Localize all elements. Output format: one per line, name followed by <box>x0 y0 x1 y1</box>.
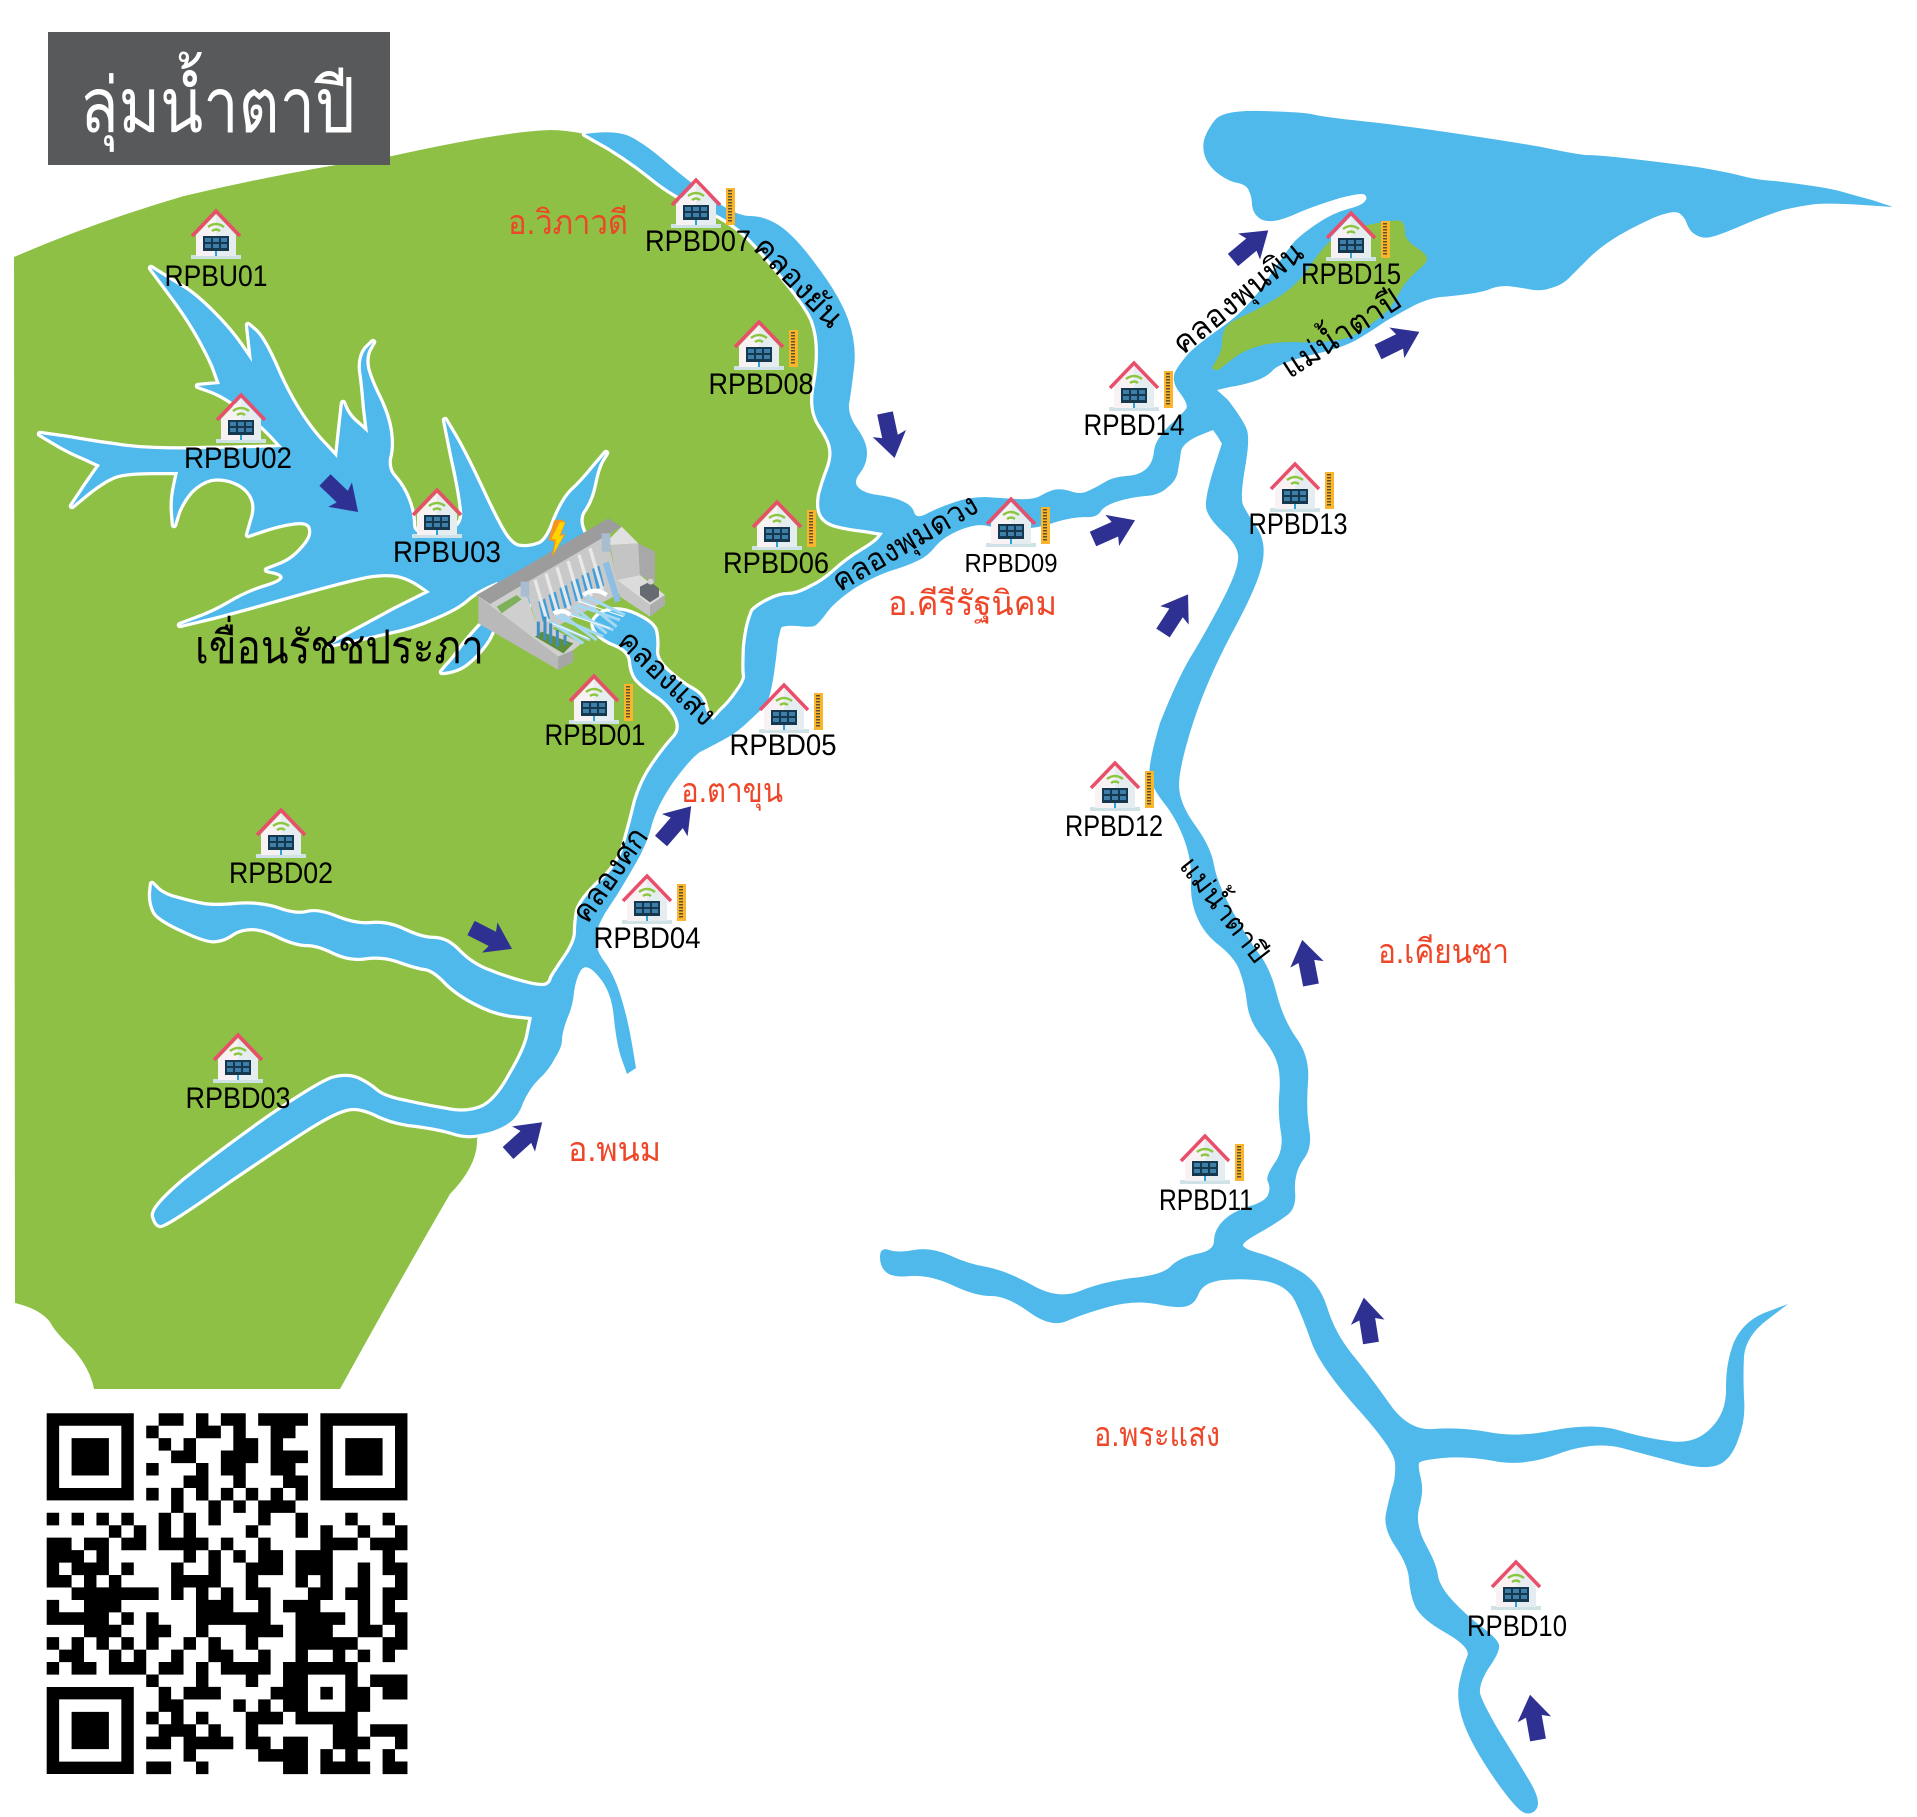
river label: Khlong Yan: คลองยัน <box>747 229 850 334</box>
station RPBD03: RPBD03 <box>186 1082 290 1115</box>
station RPBD06: RPBD06 <box>723 547 829 580</box>
station RPBD14: RPBD14 <box>1084 409 1184 442</box>
arrow: Tapi lower flow <box>1347 1295 1388 1346</box>
station RPBU03: RPBU03 <box>393 536 501 569</box>
station RPBD05 <box>730 685 836 762</box>
station RPBD05: RPBD05 <box>730 729 836 762</box>
river label: Khlong Phunphin: คลองพุนพิน <box>1165 234 1311 362</box>
station RPBD02: RPBD02 <box>229 857 333 890</box>
title <box>48 32 390 165</box>
station RPBD09 <box>964 499 1058 578</box>
river label: Khlong Saeng: คลองแสง <box>611 623 723 733</box>
QR code <box>47 1413 407 1774</box>
river label: Mae Nam Tapi mouth: แม่น้ำตาปี <box>1272 278 1407 385</box>
station RPBD15: RPBD15 <box>1301 258 1401 291</box>
station RPBD12: RPBD12 <box>1065 810 1163 843</box>
arrow: Khlong Phum Duang flow <box>1086 505 1142 555</box>
station RPBU02: RPBU02 <box>184 442 292 475</box>
arrow: Tapi headwater flow <box>1513 1692 1555 1743</box>
station RPBD15 <box>1301 213 1401 291</box>
arrow: Tapi mid flow <box>1286 937 1328 988</box>
station RPBD11 <box>1159 1136 1253 1217</box>
station RPBD13 <box>1248 464 1348 541</box>
district: Khian Sa: อ.เคียนซา <box>1378 933 1509 971</box>
station RPBD01 <box>544 676 646 752</box>
dam illustration <box>477 518 665 670</box>
station RPBD10 <box>1467 1562 1567 1643</box>
station RPBU01: RPBU01 <box>164 260 268 293</box>
arrow: tributary flow <box>463 913 520 964</box>
station RPBD10: RPBD10 <box>1467 1610 1567 1643</box>
station RPBD06 <box>723 502 829 580</box>
district: Khiri Rat Nikhom: อ.คีรีรัฐนิคม <box>888 585 1057 624</box>
station RPBU01 <box>164 211 268 293</box>
station RPBD08 <box>708 322 814 401</box>
land: green basin area <box>14 130 905 1389</box>
station RPBD07: RPBD07 <box>645 225 751 258</box>
station RPBD09: RPBD09 <box>964 548 1058 578</box>
arrow: Tapi mouth flow <box>1371 317 1427 367</box>
station RPBD12 <box>1065 763 1163 843</box>
station RPBD08: RPBD08 <box>708 368 814 401</box>
arrow: Khlong Phunphin flow <box>1222 217 1279 273</box>
arrow: Tapi north flow <box>1149 585 1202 642</box>
district: Ta Khun: อ.ตาขุน <box>681 772 783 811</box>
district: Phrasaeng: อ.พระแสง <box>1094 1416 1220 1454</box>
station RPBD11: RPBD11 <box>1159 1184 1253 1217</box>
arrow: Phanom flow <box>497 1110 554 1166</box>
arrow: flow into reservoir <box>313 468 370 524</box>
arrow: Khlong Sok flow <box>648 795 704 852</box>
station RPBD07 <box>645 180 751 258</box>
station RPBD04 <box>594 876 700 955</box>
station RPBD02 <box>229 810 333 890</box>
district: Wiphawadi: อ.วิภาวดี <box>508 204 628 242</box>
land: river island <box>1212 220 1427 370</box>
station RPBD14 <box>1084 363 1184 442</box>
station RPBD03 <box>186 1035 290 1115</box>
river label: Khlong Sok: คลองศก <box>564 820 655 929</box>
station RPBU02 <box>184 395 292 475</box>
station RPBU03 <box>393 490 501 569</box>
district: Phanom: อ.พนม <box>568 1131 661 1169</box>
arrow: Khlong Yan flow <box>868 409 911 462</box>
dam name: เขื่อนรัชชประภา <box>195 615 484 673</box>
river label: Mae Nam Tapi middle: แม่น้ำตาปี <box>1174 848 1279 968</box>
station RPBD01: RPBD01 <box>544 719 646 752</box>
station RPBD13: RPBD13 <box>1248 508 1348 541</box>
river label: Khlong Phum Duang: คลองพุมดวง <box>825 487 985 600</box>
title: ลุ่มน้ำตาปี <box>80 51 355 152</box>
station RPBD04: RPBD04 <box>594 922 700 955</box>
